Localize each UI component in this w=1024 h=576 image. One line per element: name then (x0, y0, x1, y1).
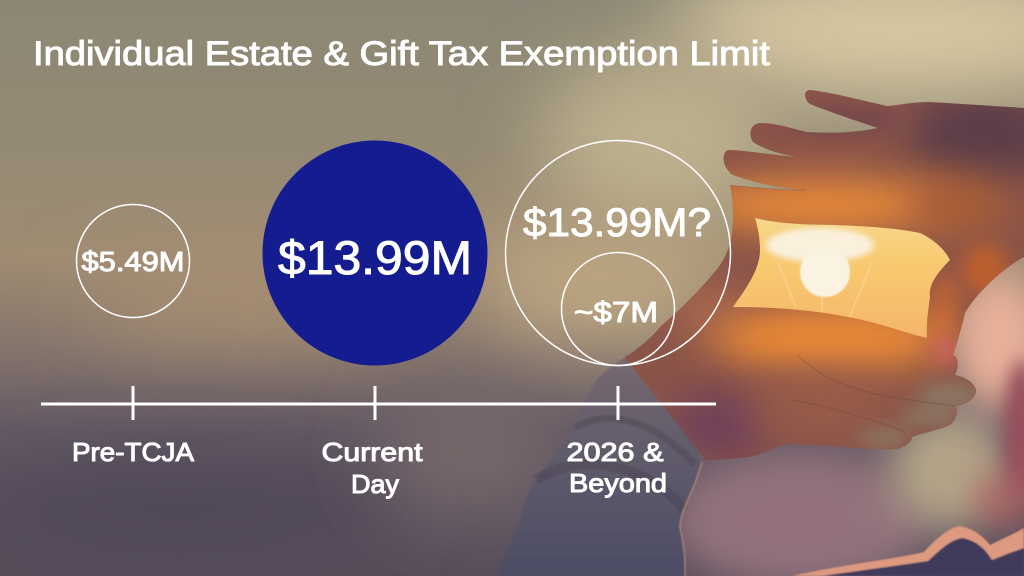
label: Current Day (322, 437, 423, 499)
circle: Pre-TCJA value: $5.49M (82, 246, 184, 277)
label: 2026 & Beyond: 2026 & (566, 437, 664, 467)
circles: 2026 and beyond values: ~$7M (574, 297, 658, 329)
photo: lower right shoulder (792, 526, 1024, 576)
circles: 2026 and beyond values (506, 140, 730, 366)
circle: current day value (262, 140, 488, 366)
photo: sun in hand frame (733, 218, 950, 338)
photo: sleeve (497, 354, 702, 576)
photo: hands framing (625, 90, 1024, 460)
label: Pre-TCJA: Pre-TCJA (72, 437, 195, 467)
label: 2026 & Beyond (566, 437, 667, 498)
circles: 2026 and beyond values: $13.99M? (523, 201, 711, 245)
timeline (41, 386, 716, 420)
label: 2026 & Beyond: Beyond (569, 468, 667, 498)
title: Individual Estate & Gift Tax Exemption Limit (33, 35, 771, 73)
label: Current Day: Current (322, 437, 423, 467)
circle: current day value: $13.99M (278, 231, 472, 284)
circle: Pre-TCJA value (76, 204, 190, 318)
label: Current Day: Day (351, 469, 399, 499)
